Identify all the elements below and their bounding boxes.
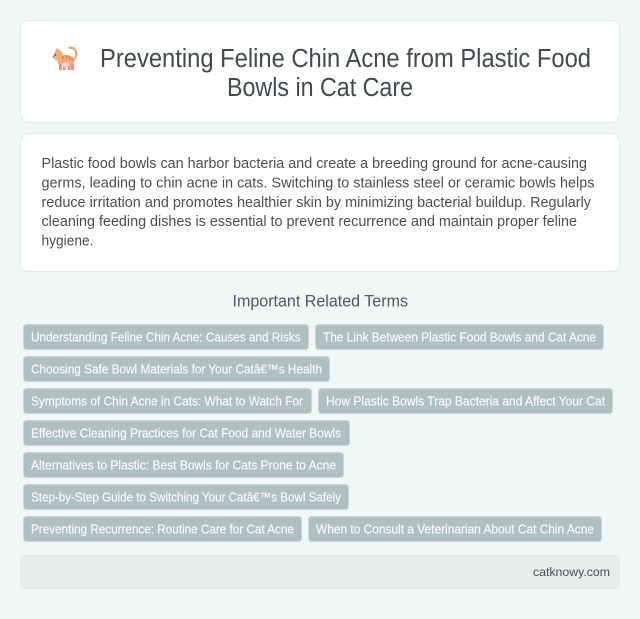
tag: Understanding Feline Chin Acne: Causes and Risks — [31, 330, 300, 344]
tag: Step-by-Step Guide to Switching Your Catâ€™s Bowl Safely — [31, 490, 342, 504]
title — [100, 45, 591, 102]
summary paragraph — [42, 156, 594, 250]
title: Bowls in Cat Care — [227, 74, 413, 102]
footer — [20, 555, 620, 589]
related terms tags — [24, 324, 612, 542]
heading: important related terms: Important Related Terms — [232, 292, 408, 310]
tag: How Plastic Bowls Trap Bacteria and Affect Your Cat — [326, 394, 605, 408]
tag — [308, 516, 602, 542]
summary paragraph: Plastic food bowls can harbor bacteria and create a breeding ground for acne-causing — [42, 156, 587, 172]
footer site name: catknowy.com — [533, 565, 610, 579]
tag: Choosing Safe Bowl Materials for Your Catâ€™s Health — [31, 362, 322, 376]
tag — [24, 324, 308, 350]
tag — [24, 356, 330, 382]
tag — [316, 324, 604, 350]
tag — [24, 452, 344, 478]
summary paragraph: germs, leading to chin acne in cats. Switching to stainless steel or ceramic bowls helps — [42, 176, 594, 192]
tag — [24, 484, 348, 510]
tag — [318, 388, 612, 414]
icon: cat — [53, 48, 76, 70]
tag — [24, 516, 302, 542]
panel: summary card — [20, 134, 620, 272]
tag — [24, 388, 312, 414]
tag: The Link Between Plastic Food Bowls and Cat Acne — [323, 330, 596, 344]
summary paragraph: hygiene. — [42, 234, 94, 250]
summary paragraph: reduce irritation and promotes healthier skin by minimizing bacterial buildup. Regularly — [42, 195, 592, 211]
tag: Preventing Recurrence: Routine Care for Cat Acne — [31, 522, 294, 536]
tag: Symptoms of Chin Acne in Cats: What to Watch For — [31, 394, 303, 408]
title: Preventing Feline Chin Acne from Plastic Food — [100, 45, 591, 73]
tag: When to Consult a Veterinarian About Cat Chin Acne — [316, 522, 594, 536]
panel: title card — [20, 20, 620, 122]
summary paragraph: cleaning feeding dishes is essential to prevent recurrence and maintain proper feline — [42, 214, 577, 230]
tag: Alternatives to Plastic: Best Bowls for Cats Prone to Acne — [31, 458, 336, 472]
tag — [24, 420, 350, 446]
tag: Effective Cleaning Practices for Cat Food and Water Bowls — [31, 426, 341, 440]
